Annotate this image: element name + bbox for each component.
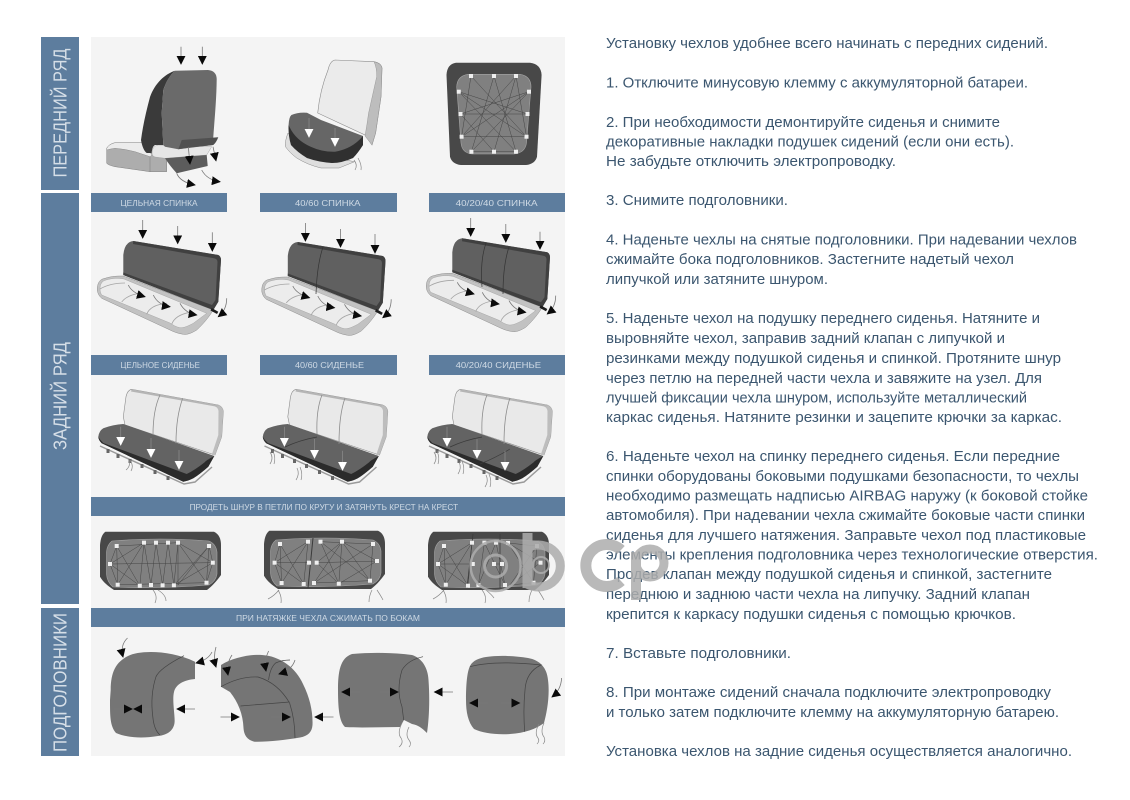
instructions text: спинки оборудованы боковыми подушками безопасности, то чехлы <box>606 469 1079 485</box>
instructions text: через петлю на передней части чехла и завяжите на узел. Для <box>606 371 1042 387</box>
instructions text: 7. Вставьте подголовники. <box>606 646 791 662</box>
label: 40/20/40 backrest: 40/20/40 СПИНКА <box>456 198 538 208</box>
icon: front seat backrest cover <box>107 47 220 185</box>
label: 40/60 seat: 40/60 СИДЕНЬЕ <box>295 360 364 370</box>
sidebar: front row <box>41 37 79 190</box>
icon: 40/20/40 rear backrest <box>426 218 556 332</box>
sidebar: rear row: ЗАДНИЙ РЯД <box>50 342 70 450</box>
instructions text: 5. Наденьте чехол на подушку переднего сиденья. Натяните и <box>606 311 1040 327</box>
icon: solid seat lacing <box>100 532 221 603</box>
label: lacing instruction: ПРОДЕТЬ ШНУР В ПЕТЛИ ПО КРУГУ И ЗАТЯНУТЬ КРЕСТ НА КРЕСТ <box>190 502 459 512</box>
label: lacing instruction <box>91 497 565 516</box>
label: 40/60 backrest <box>260 193 397 212</box>
instructions text: 3. Снимите подголовники. <box>606 193 788 209</box>
label: 40/60 backrest: 40/60 СПИНКА <box>295 198 361 208</box>
instructions text: каркас сиденья. Натяните резинки и зацепите крючки за каркас. <box>606 410 1062 426</box>
instructions text: необходимо размещать надписью AIRBAG наружу (к боковой стойке <box>606 488 1088 504</box>
icon: front seat cushion cover <box>285 60 382 170</box>
instructions text: переднюю и заднюю части чехла на липучку. Задний клапан <box>606 587 1030 603</box>
label: solid backrest <box>91 193 227 212</box>
watermark logo <box>471 533 664 600</box>
icon: 40/60 rear seat <box>263 389 388 484</box>
sidebar: headrests: ПОДГОЛОВНИКИ <box>50 613 70 752</box>
instructions text: элементы крепления подголовника через технологические отверстия. <box>606 548 1098 564</box>
instructions text: автомобиля). При надевании чехла сжимайте боковые части спинки <box>606 508 1085 524</box>
instructions text: лучшей фиксации чехла шнуром, используйте металлический <box>606 390 1027 406</box>
sidebar: rear row <box>41 193 79 604</box>
instructions text: 6. Наденьте чехол на спинку переднего сиденья. Если передние <box>606 449 1060 465</box>
label: headrest instruction: ПРИ НАТЯЖКЕ ЧЕХЛА СЖИМАТЬ ПО БОКАМ <box>236 613 420 623</box>
instructions text: Не забудьте отключить электропроводку. <box>606 154 896 170</box>
grey illustration panel <box>91 37 565 756</box>
instructions text: резинками между подушкой сиденья и спинкой. Протяните шнур <box>606 351 1061 367</box>
icon: headrest step 3 <box>338 653 453 747</box>
icon: headrest step 4 <box>466 656 562 744</box>
instructions text: Продев клапан между подушкой сиденья и спинкой, застегните <box>606 567 1052 583</box>
label: solid seat: ЦЕЛЬНОЕ СИДЕНЬЕ <box>120 360 200 370</box>
instructions text: выровняйте чехол, заправив задний клапан с липучкой и <box>606 331 1005 347</box>
icon: headrest step 2 <box>220 651 334 742</box>
icon: 40/20/40 rear seat <box>427 389 552 487</box>
label: solid backrest: ЦЕЛЬНАЯ СПИНКА <box>120 198 198 208</box>
icon: 40/60 seat lacing <box>264 531 385 603</box>
icon: headrest step 1 <box>110 638 216 737</box>
instructions text: и только затем подключите клемму на аккумуляторную батарею. <box>606 705 1059 721</box>
label: headrest instruction <box>91 608 565 627</box>
label: 40/20/40 seat <box>429 355 565 375</box>
instructions text: липучкой или затяните шнуром. <box>606 272 828 288</box>
icon: 40/60 rear backrest <box>262 223 391 335</box>
instructions text: крепится к каркасу подушки сиденья с помощью крючков. <box>606 607 1016 623</box>
icon: front seat underside lacing <box>446 63 542 165</box>
icon: solid rear backrest <box>97 220 227 334</box>
label: solid seat <box>91 355 227 375</box>
instructions text: 1. Отключите минусовую клемму с аккумуляторной батареи. <box>606 76 1028 92</box>
icon: 40/20/40 seat lacing <box>428 532 549 603</box>
instructions text: Установку чехлов удобнее всего начинать с передних сидений. <box>606 36 1048 52</box>
instructions text: 4. Наденьте чехлы на снятые подголовники. При надевании чехлов <box>606 232 1077 248</box>
label: 40/20/40 backrest <box>429 193 565 212</box>
instructions text: сжимайте бока подголовников. Застегните надетый чехол <box>606 252 1014 268</box>
label: 40/60 seat <box>260 355 397 375</box>
instructions text: 8. При монтаже сидений сначала подключите электропроводку <box>606 685 1052 701</box>
instructions text <box>606 36 1098 760</box>
sidebar: front row: ПЕРЕДНИЙ РЯД <box>50 48 70 178</box>
instructions text: Установка чехлов на задние сиденья осуществляется аналогично. <box>606 744 1072 760</box>
instructions text: сиденья для лучшего натяжения. Заправьте чехол под пластиковые <box>606 528 1086 544</box>
instructions text: 2. При необходимости демонтируйте сиденья и снимите <box>606 115 1000 131</box>
sidebar: headrests <box>41 608 79 756</box>
label: 40/20/40 seat: 40/20/40 СИДЕНЬЕ <box>456 360 541 370</box>
instructions text: декоративные накладки подушек сидений (если они есть). <box>606 134 1014 150</box>
icon: solid rear seat <box>98 389 223 484</box>
